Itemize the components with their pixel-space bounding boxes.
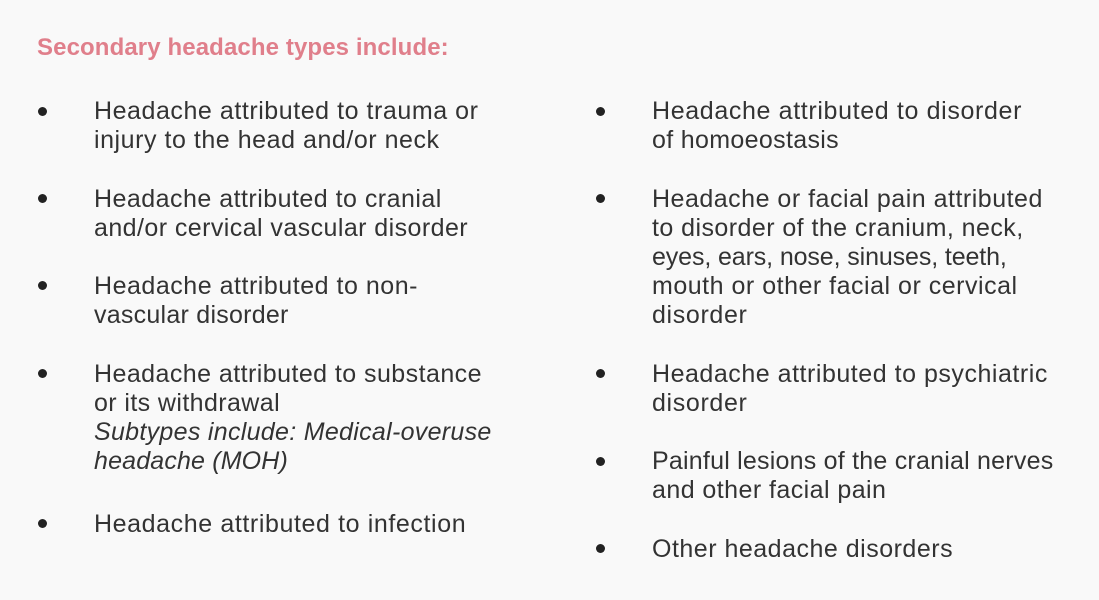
panel: left column list xyxy=(38,97,492,538)
item: vascular: and/or cervical vascular disorder xyxy=(94,214,468,242)
item: trauma: Headache attributed to trauma or xyxy=(94,97,478,125)
item: facial pain xyxy=(652,185,1043,329)
item: non-vascular: vascular disorder xyxy=(94,301,289,329)
bullet 5 xyxy=(38,518,47,528)
item: trauma xyxy=(94,97,478,154)
item: non-vascular xyxy=(94,272,418,329)
bullet 6 xyxy=(596,107,605,116)
item: vascular: Headache attributed to cranial xyxy=(94,185,442,213)
item: other: Other headache disorders xyxy=(652,535,953,563)
item: homoeostasis: of homoeostasis xyxy=(652,126,839,154)
item: facial pain: mouth or other facial or cervical xyxy=(652,272,1018,300)
bullet 4 xyxy=(38,369,47,378)
bullet 3 xyxy=(38,281,47,290)
item: vascular xyxy=(94,185,468,242)
item: trauma: injury to the head and/or neck xyxy=(94,126,440,154)
item: facial pain: Headache or facial pain attributed xyxy=(652,185,1043,213)
bullet 2 xyxy=(38,194,47,203)
item: substance xyxy=(94,360,492,475)
item: substance: or its withdrawal xyxy=(94,389,280,417)
item: psychiatric: Headache attributed to psychiatric xyxy=(652,360,1048,388)
bullet 10 xyxy=(596,544,605,552)
item: facial pain: eyes, ears, nose, sinuses, teeth, xyxy=(652,243,1007,271)
item: cranial nerves: and other facial pain xyxy=(652,476,886,504)
panel: right column list xyxy=(596,97,1053,563)
item: psychiatric xyxy=(652,360,1048,417)
item: facial pain: disorder xyxy=(652,301,748,329)
bullet 1 xyxy=(38,107,47,116)
item: substance: Headache attributed to substance xyxy=(94,360,482,388)
item: homoeostasis: Headache attributed to disorder xyxy=(652,97,1022,125)
bullet 9 xyxy=(596,456,605,466)
item: facial pain: to disorder of the cranium, neck, xyxy=(652,214,1024,242)
item: infection: Headache attributed to infection xyxy=(94,510,466,538)
bullet 8 xyxy=(596,369,605,378)
item: cranial nerves: Painful lesions of the cranial nerves xyxy=(652,447,1053,475)
item: homoeostasis xyxy=(652,97,1022,154)
bullet 7 xyxy=(596,194,605,203)
title: Secondary headache types include: xyxy=(37,34,449,61)
item: cranial nerves xyxy=(652,447,1053,504)
item: psychiatric: disorder xyxy=(652,389,748,417)
item: substance: Subtypes include: Medical-overuse xyxy=(94,418,492,446)
item: non-vascular: Headache attributed to non- xyxy=(94,272,418,300)
item: substance: headache (MOH) xyxy=(94,447,288,475)
